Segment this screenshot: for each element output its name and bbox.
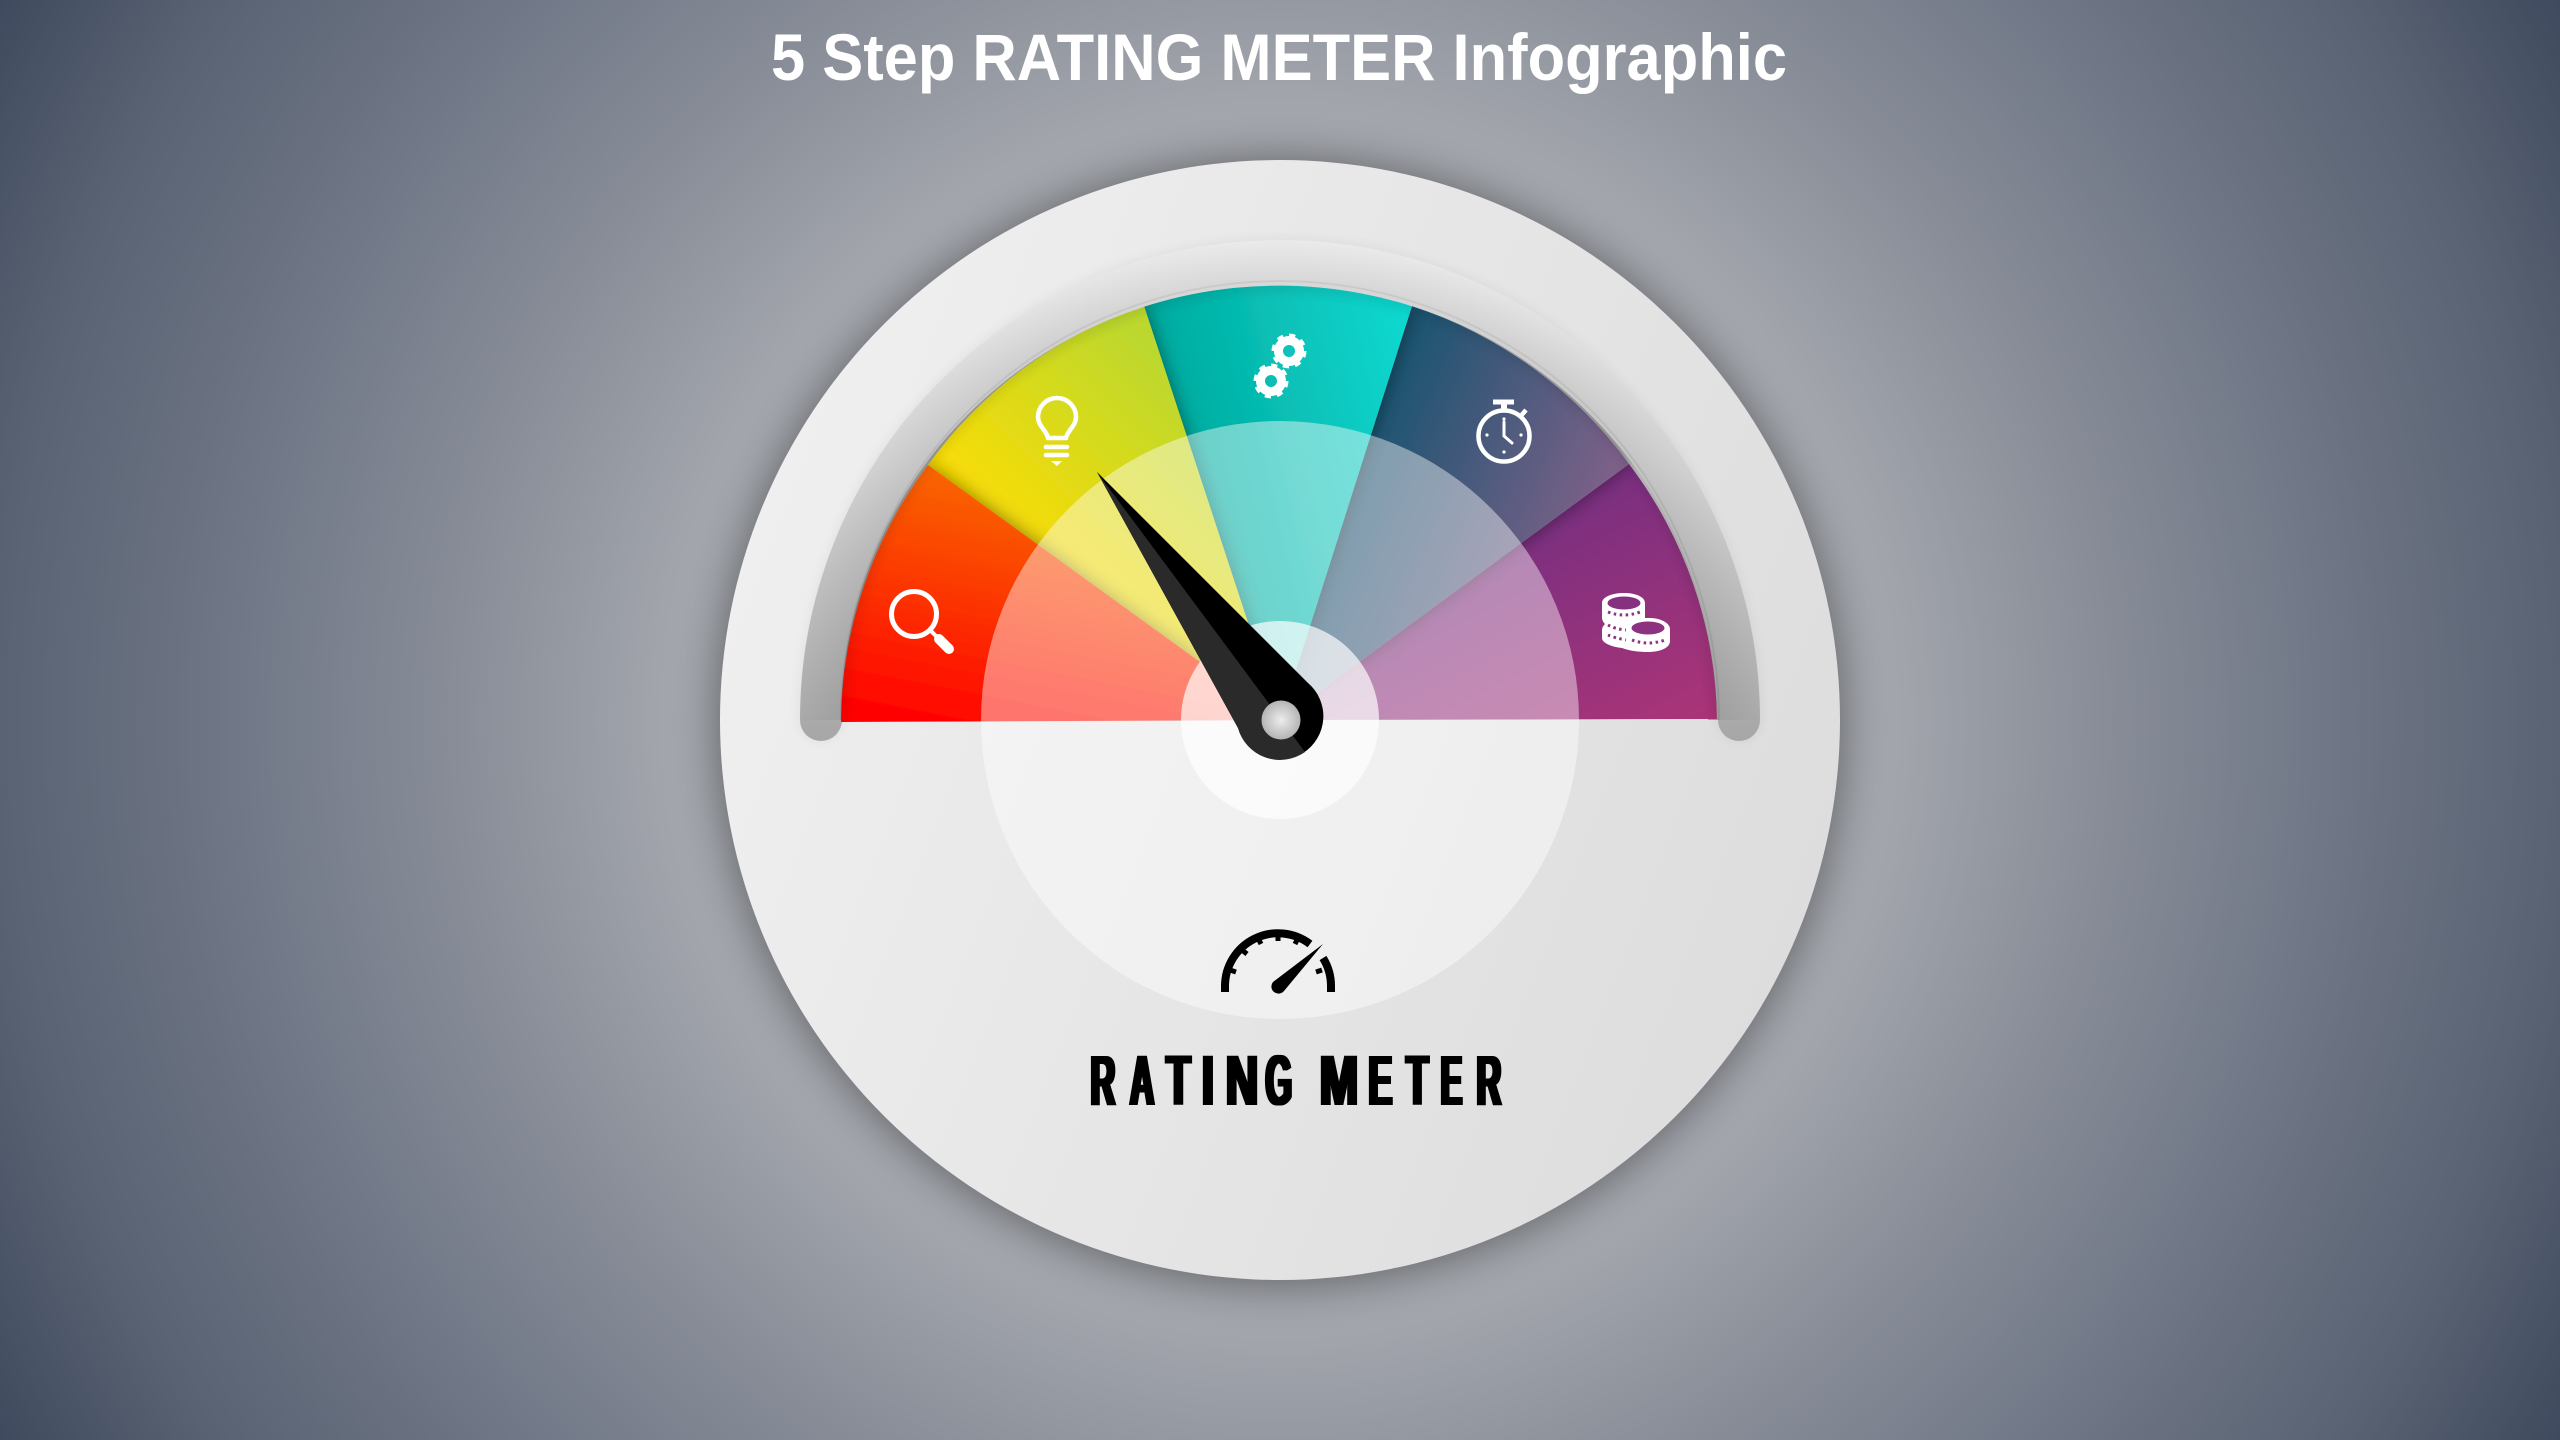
inner arc shadow [841, 286, 1717, 722]
needle [1097, 472, 1323, 760]
gauge label: M [1320, 1041, 1358, 1120]
segment: red [841, 465, 1280, 722]
needle hub [1262, 700, 1300, 740]
icon: stopwatch [1478, 402, 1530, 462]
panel: gauge disc [718, 160, 1842, 1284]
icon: speedometer [1225, 933, 1331, 994]
segment: yellow [923, 305, 1256, 664]
icon: coins [1602, 593, 1670, 652]
gauge label: T [1406, 1041, 1428, 1120]
gauge label: G [1266, 1041, 1292, 1120]
icon: magnifying glass [892, 592, 949, 649]
gauge label [1091, 1040, 1501, 1121]
gauge label: A [1130, 1041, 1154, 1120]
gauge label: R [1091, 1041, 1115, 1120]
gauge label: I [1202, 1042, 1214, 1121]
title: 5 Step RATING METER Infographic [771, 20, 1787, 94]
gauge label: E [1368, 1040, 1392, 1120]
segment: purple [1280, 464, 1717, 720]
small translucent hub circle [1181, 621, 1379, 819]
segment: teal [1144, 285, 1412, 720]
icon: gears [1256, 336, 1304, 396]
colored gauge segments [841, 285, 1717, 722]
rim band around gauge [821, 261, 1739, 720]
gauge label: E [1441, 1041, 1462, 1120]
icon: light bulb [1038, 398, 1076, 466]
large translucent inner circle [981, 421, 1579, 1019]
segment: dark blue [1280, 306, 1629, 720]
gauge label: N [1226, 1040, 1258, 1121]
gauge label: T [1166, 1042, 1190, 1121]
gauge label: R [1477, 1041, 1501, 1120]
